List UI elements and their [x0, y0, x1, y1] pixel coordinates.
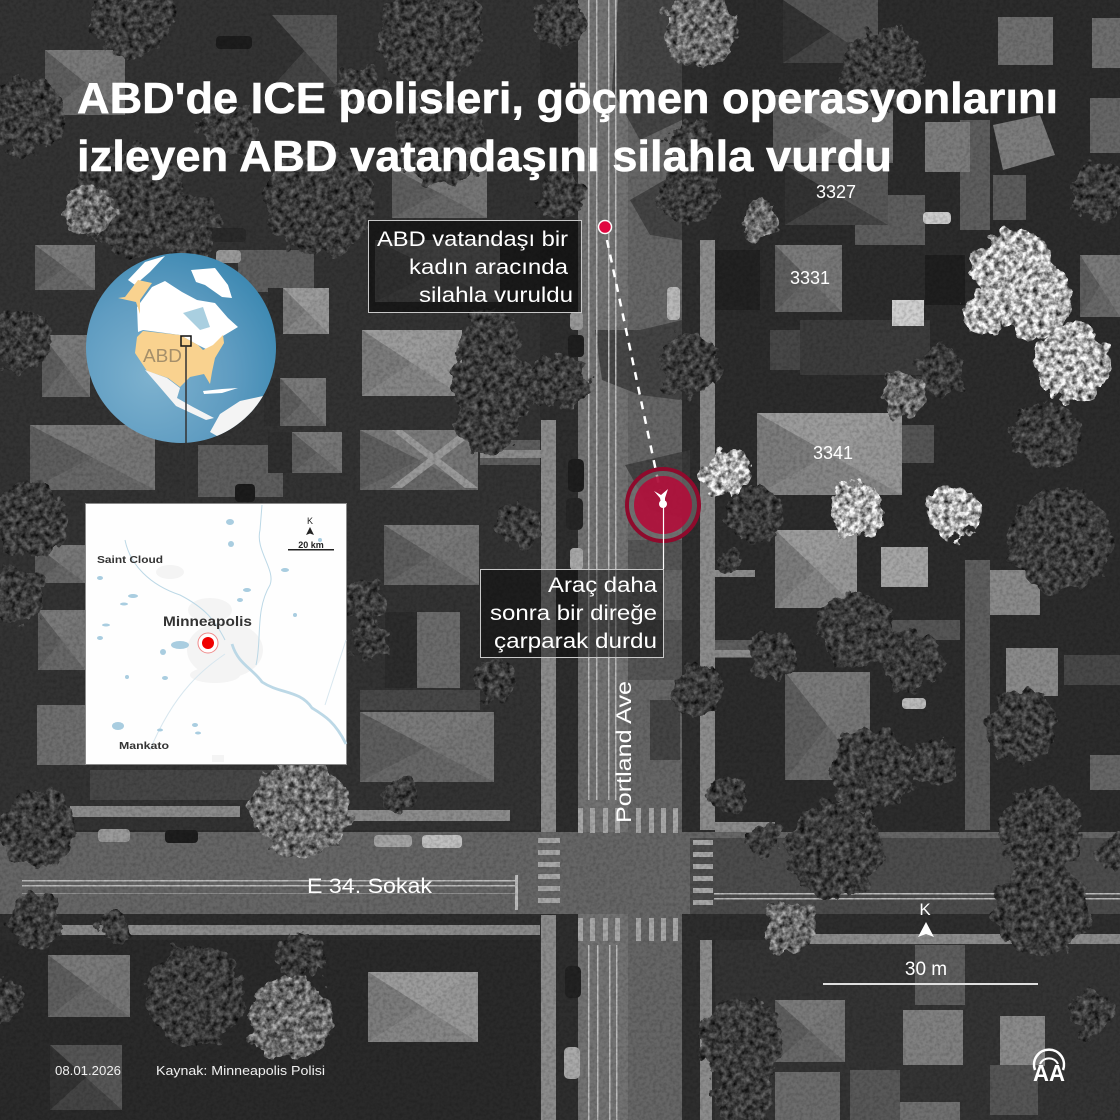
- Canada: [137, 281, 238, 350]
- date and source: Kaynak: Minneapolis Polisi: [156, 1064, 325, 1078]
- east west road: [0, 832, 1120, 914]
- inset scale and north arrow: K: [307, 516, 313, 526]
- title: izleyen ABD vatandaşını silahla vurdu: [77, 132, 892, 181]
- city labels: Mankato: [119, 741, 169, 752]
- scale bar: 30 m: [905, 959, 947, 980]
- Mexico and Central America: [145, 370, 214, 420]
- callout: shooting: kadın aracında: [409, 256, 568, 279]
- inset scale and north arrow: 20 km: [298, 540, 324, 550]
- house numbers: 3327: [816, 182, 856, 202]
- route: dashed line: [607, 240, 660, 490]
- inset scale and north arrow: [288, 516, 334, 550]
- incident marker: [627, 469, 699, 569]
- callout: shooting: [368, 220, 582, 312]
- locator square: [181, 336, 191, 346]
- inset map: [86, 504, 346, 764]
- city labels: Saint Cloud: [97, 555, 163, 566]
- globe locator: [86, 253, 276, 443]
- callout: crash: çarparak durdu: [494, 630, 657, 653]
- callout: crash: [480, 570, 664, 658]
- callout: shooting: ABD vatandaşı bir: [377, 228, 568, 251]
- city labels: Minneapolis: [163, 614, 252, 629]
- rivers: [125, 505, 346, 750]
- callout: crash: sonra bir direğe: [490, 602, 657, 625]
- Caribbean: [203, 388, 238, 394]
- start point marker: [598, 220, 612, 234]
- north arrow: K: [919, 900, 931, 919]
- date and source: [55, 1064, 325, 1078]
- location marker: [198, 633, 218, 653]
- Alaska: [118, 280, 152, 314]
- light trees: [702, 230, 1110, 538]
- date and source: 08.01.2026: [55, 1064, 121, 1078]
- country label: ABD: [143, 345, 182, 366]
- callout: shooting: silahla vuruldu: [419, 284, 573, 307]
- Greenland: [191, 268, 232, 298]
- main road: [578, 0, 682, 1120]
- house numbers: 3341: [813, 443, 853, 463]
- AA logo: [1033, 1050, 1065, 1086]
- lots and driveways: [90, 120, 990, 1005]
- South America: [210, 396, 263, 440]
- crosswalks: [538, 808, 713, 941]
- street label: Portland Ave: Portland Ave: [613, 681, 636, 823]
- cars: [98, 36, 951, 1079]
- Arctic ice: [128, 256, 165, 285]
- north arrow: [918, 900, 934, 937]
- Contiguous USA: [135, 331, 224, 387]
- callout: crash: Araç daha: [548, 574, 657, 597]
- lakes: [97, 519, 322, 734]
- Hudson Bay: [183, 307, 210, 330]
- house numbers: [790, 182, 856, 463]
- connector line: [185, 346, 187, 504]
- house numbers: 3331: [790, 268, 830, 288]
- AA logo: AA: [1033, 1060, 1065, 1086]
- mid tone trees: [64, 0, 927, 1060]
- title: [77, 74, 1058, 181]
- urban areas: [156, 565, 263, 762]
- tree shadows on road: [595, 0, 690, 760]
- street label: E 34. Sokak: E 34. Sokak: [307, 875, 433, 898]
- sidewalks: [60, 240, 1120, 1120]
- city labels: [97, 555, 252, 752]
- title: ABD'de ICE polisleri, göçmen operasyonlarını: [77, 74, 1058, 123]
